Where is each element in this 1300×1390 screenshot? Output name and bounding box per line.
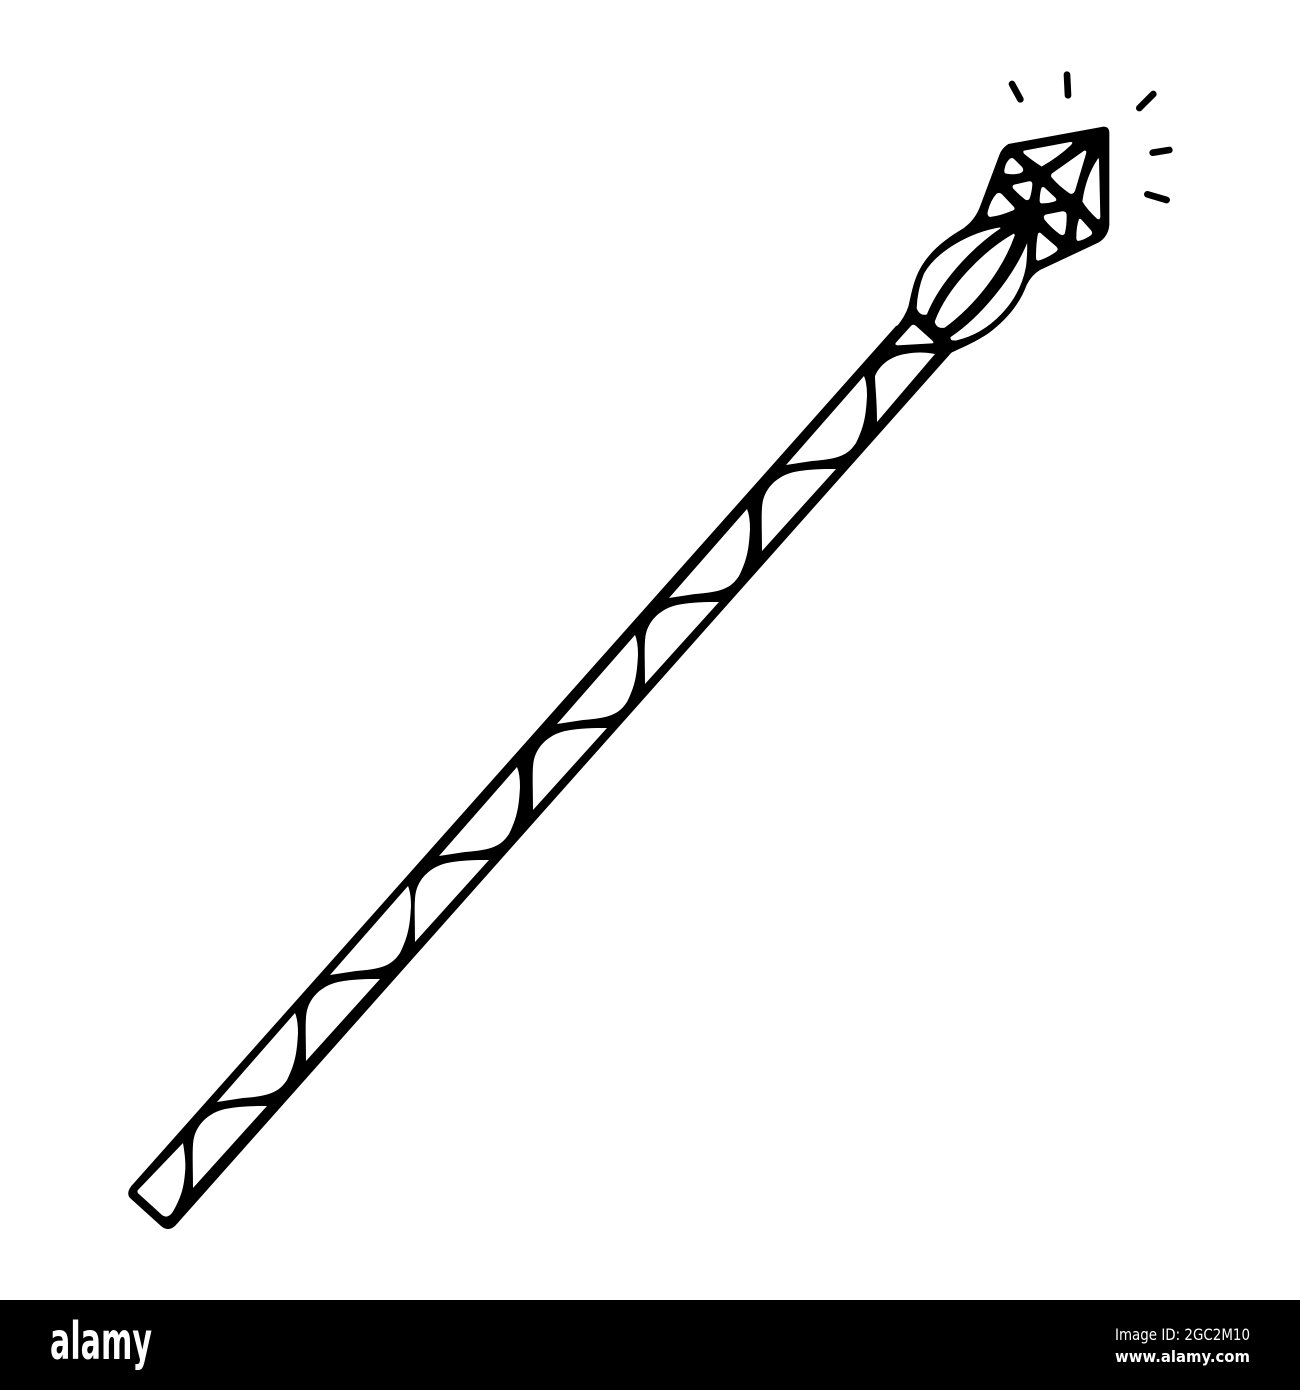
right petal	[950, 240, 1028, 341]
head silhouette	[897, 127, 1109, 353]
top shaft cell below the collar	[875, 352, 935, 422]
left petal	[916, 227, 1002, 315]
sparkle lines	[1012, 75, 1169, 200]
footer bar	[0, 1300, 1300, 1390]
image id: Image ID: 2GC2M10	[1115, 1325, 1250, 1344]
shaft end cell	[137, 1143, 185, 1217]
website: www.alamy.com	[1115, 1347, 1250, 1366]
shaft spiral pattern	[193, 376, 867, 1188]
staff head with crystal	[895, 75, 1169, 353]
centre petal	[934, 233, 1016, 329]
crystal facets	[895, 141, 1101, 346]
staff shaft	[128, 315, 952, 1229]
collar triangle	[895, 324, 934, 346]
footer logo: alamy	[50, 1312, 152, 1372]
illustration: magic staff	[128, 75, 1169, 1229]
